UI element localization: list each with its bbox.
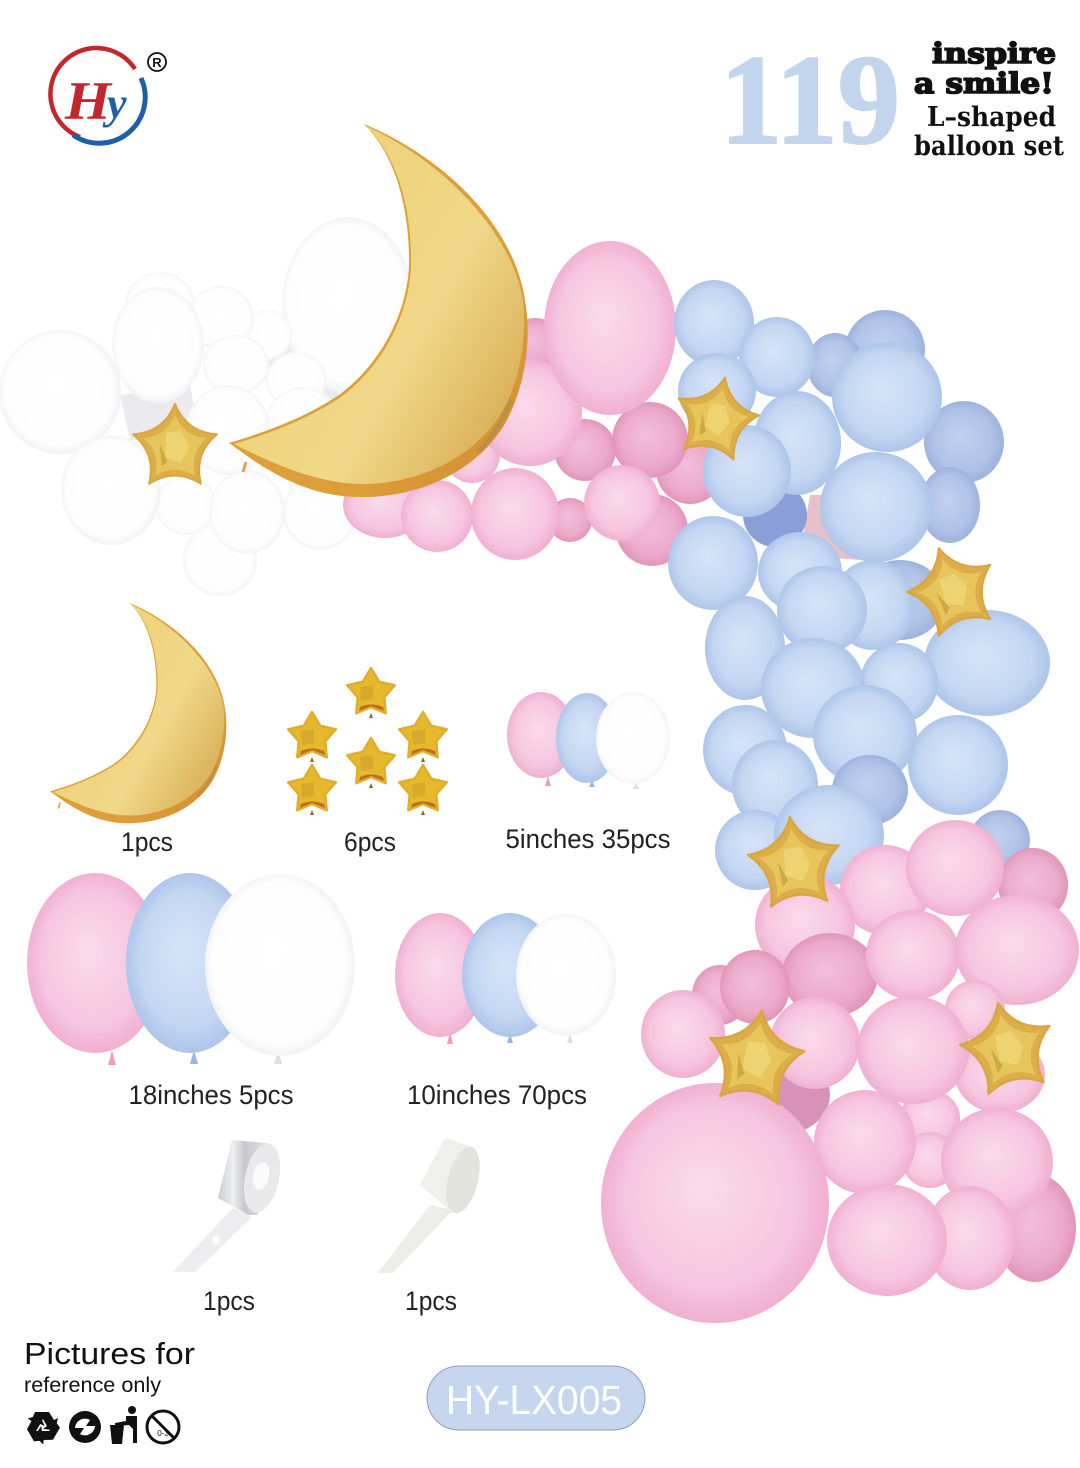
label: star count: 6pcs <box>344 827 396 857</box>
icon: recycling <box>23 1412 62 1447</box>
item: moon balloon <box>50 603 226 823</box>
balloon arch: pink bottom section <box>601 820 1079 1323</box>
logo: HY brand mark <box>50 48 166 143</box>
label: 18 inches: 18inches 5pcs <box>128 1080 294 1110</box>
foil moon: large <box>229 124 528 497</box>
label: glue dots count: 1pcs <box>405 1286 457 1316</box>
icon: not for under 3: 0-3 <box>157 1429 169 1438</box>
disclaimer text: Pictures for <box>24 1336 195 1371</box>
slogan and set name: balloon set <box>914 131 1064 162</box>
icon: tidy man bin <box>110 1406 137 1444</box>
label: tape count: 1pcs <box>203 1286 255 1316</box>
item: 18 inch balloons <box>27 873 355 1065</box>
icon: not for under 3 <box>147 1411 179 1443</box>
item: balloon arch tape <box>173 1140 286 1272</box>
logo: HY brand mark: y <box>102 79 127 128</box>
disclaimer text <box>24 1336 195 1397</box>
balloon arch: blue section <box>668 280 1050 890</box>
slogan and set name: L–shaped <box>927 102 1056 133</box>
title: 119: 119 <box>720 29 900 171</box>
balloon arch: white cluster <box>0 217 414 596</box>
disclaimer text: reference only <box>24 1374 162 1397</box>
label: moon count: 1pcs <box>121 827 173 857</box>
logo: HY brand mark: H <box>64 71 113 131</box>
icon: green dot <box>69 1411 101 1443</box>
slogan and set name: a smile! <box>914 67 1054 100</box>
item: glue dots roll <box>378 1138 486 1273</box>
label: 10 inches: 10inches 70pcs <box>407 1080 587 1110</box>
foil stars on arch <box>133 369 1061 1107</box>
item: 5 inch balloons <box>507 692 670 789</box>
balloon arch: pink top section <box>343 241 724 566</box>
model number pill: HY-LX005 <box>446 1377 622 1423</box>
item: 10 inch balloons <box>395 913 616 1044</box>
slogan and set name <box>914 37 1064 162</box>
slogan and set name: inspire <box>932 37 1056 70</box>
model number pill <box>427 1366 645 1430</box>
logo: HY brand mark: R <box>152 55 162 70</box>
item: six small stars <box>288 668 447 815</box>
label: 5 inches: 5inches 35pcs <box>506 824 670 854</box>
